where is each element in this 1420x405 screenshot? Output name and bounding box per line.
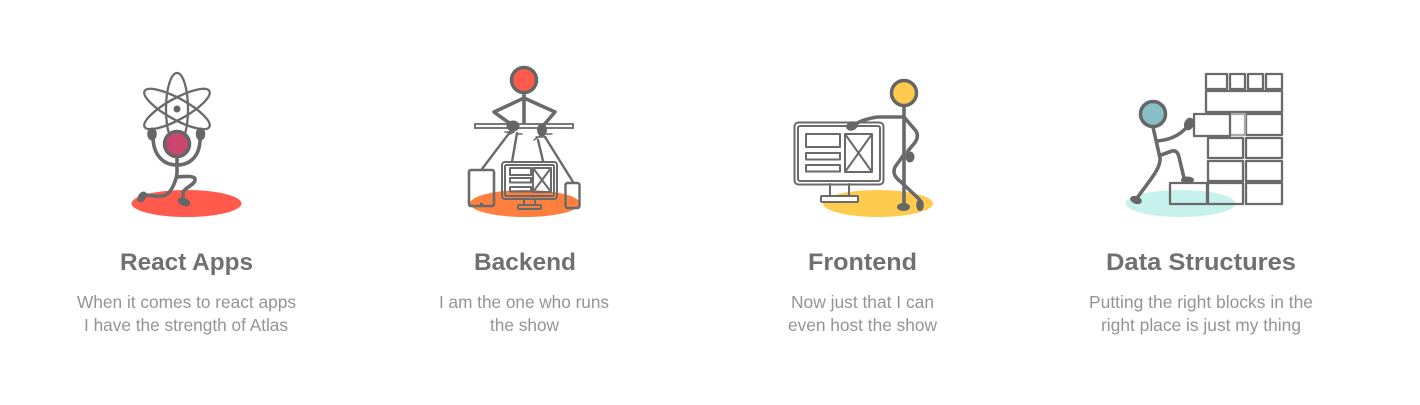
- heading: React Apps: React Apps: [120, 249, 253, 276]
- text: Backend description: [439, 292, 609, 335]
- text: Backend description: I am the one who runs: [439, 292, 609, 312]
- text: Frontend description: even host the show: [788, 315, 938, 335]
- panel: React Apps: [77, 73, 296, 335]
- text: React Apps description: [77, 292, 296, 335]
- text: Data Structures description: right place is just my thing: [1101, 315, 1301, 335]
- heading: Frontend: Frontend: [808, 249, 917, 276]
- panel: Backend: [439, 68, 609, 335]
- text: React Apps description: I have the strength of Atlas: [84, 315, 288, 335]
- text: Data Structures description: Putting the right blocks in the: [1089, 292, 1313, 312]
- icon: atlas figure holding atom: [132, 73, 242, 217]
- panel: Frontend: [788, 80, 938, 335]
- icon: figure leaning on monitor: [794, 80, 933, 217]
- text: React Apps description: When it comes to react apps: [77, 292, 296, 312]
- icon: puppeteer figure controlling devices: [469, 68, 580, 217]
- heading: Data Structures: Data Structures: [1106, 249, 1296, 276]
- text: Data Structures description: [1089, 292, 1313, 335]
- panel: Data Structures: [1089, 74, 1313, 335]
- text: Backend description: the show: [490, 315, 560, 335]
- text: Frontend description: Now just that I can: [791, 292, 934, 312]
- heading: Backend: Backend: [474, 249, 576, 276]
- icon: figure building block wall: [1126, 74, 1282, 217]
- text: Frontend description: [788, 292, 938, 335]
